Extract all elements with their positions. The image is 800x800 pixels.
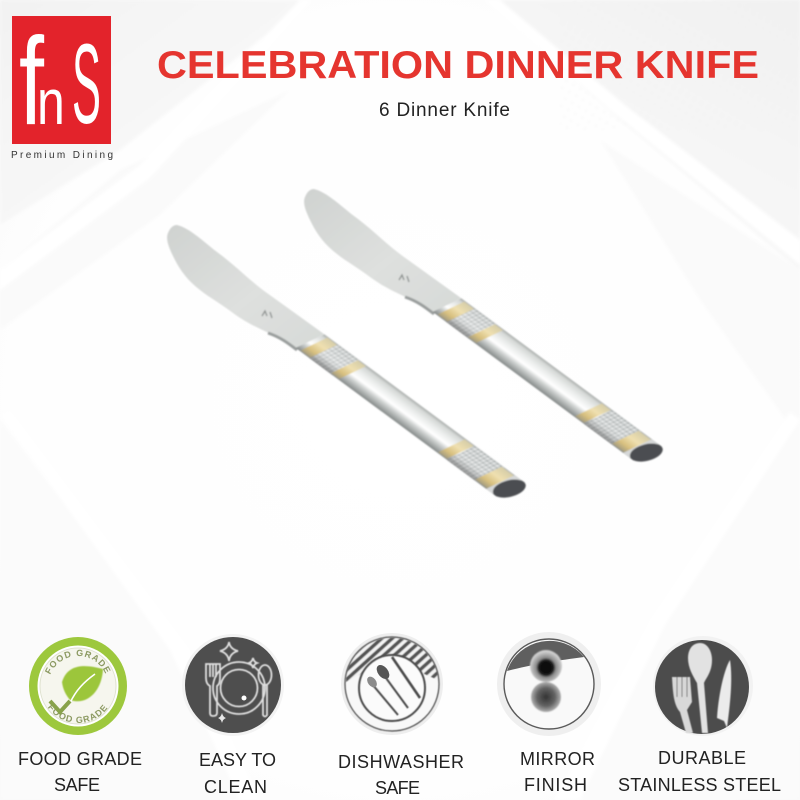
feature: food grade safe [18, 637, 142, 795]
knife blade [167, 225, 324, 350]
icon: spoon fork knife [653, 636, 753, 736]
icon: plate and sparkles [182, 634, 284, 736]
label: SAFE [375, 778, 420, 798]
label: MIRROR [520, 749, 595, 769]
subtitle: 6 Dinner Knife [379, 100, 510, 121]
label: FINISH [524, 775, 587, 795]
icon: food grade badge: FOOD GRADE [44, 650, 111, 674]
label: EASY TO [199, 750, 276, 770]
knife: left [167, 225, 532, 501]
logo: tagline: Premium Dining [11, 150, 113, 161]
feature: durable stainless steel [618, 636, 781, 795]
feature: dishwasher safe [338, 633, 470, 798]
knife: right [304, 189, 669, 465]
title: CELEBRATION DINNER KNIFE [157, 44, 759, 87]
label: SAFE [54, 775, 100, 795]
feature: easy to clean [182, 634, 284, 797]
logo: red square [12, 16, 111, 144]
logo [11, 13, 113, 161]
icon: mirror balls [497, 632, 601, 736]
knife handle [296, 334, 532, 501]
icon: dishwasher plate and cutlery [341, 633, 443, 735]
label: CLEAN [204, 777, 267, 797]
logo: fnS letters [19, 13, 101, 152]
label: FOOD GRADE [18, 749, 142, 769]
label: STAINLESS STEEL [618, 775, 781, 795]
feature: mirror finish [497, 632, 601, 795]
icon: food grade badge: FOOD GRADE [48, 704, 108, 723]
label: DURABLE [658, 748, 746, 768]
logo: fnS letters: S [72, 21, 101, 148]
logo: fnS letters: f [19, 13, 45, 152]
label: DISHWASHER [338, 752, 464, 772]
logo: fnS letters: n [37, 67, 65, 138]
icon: food grade badge [29, 637, 127, 735]
